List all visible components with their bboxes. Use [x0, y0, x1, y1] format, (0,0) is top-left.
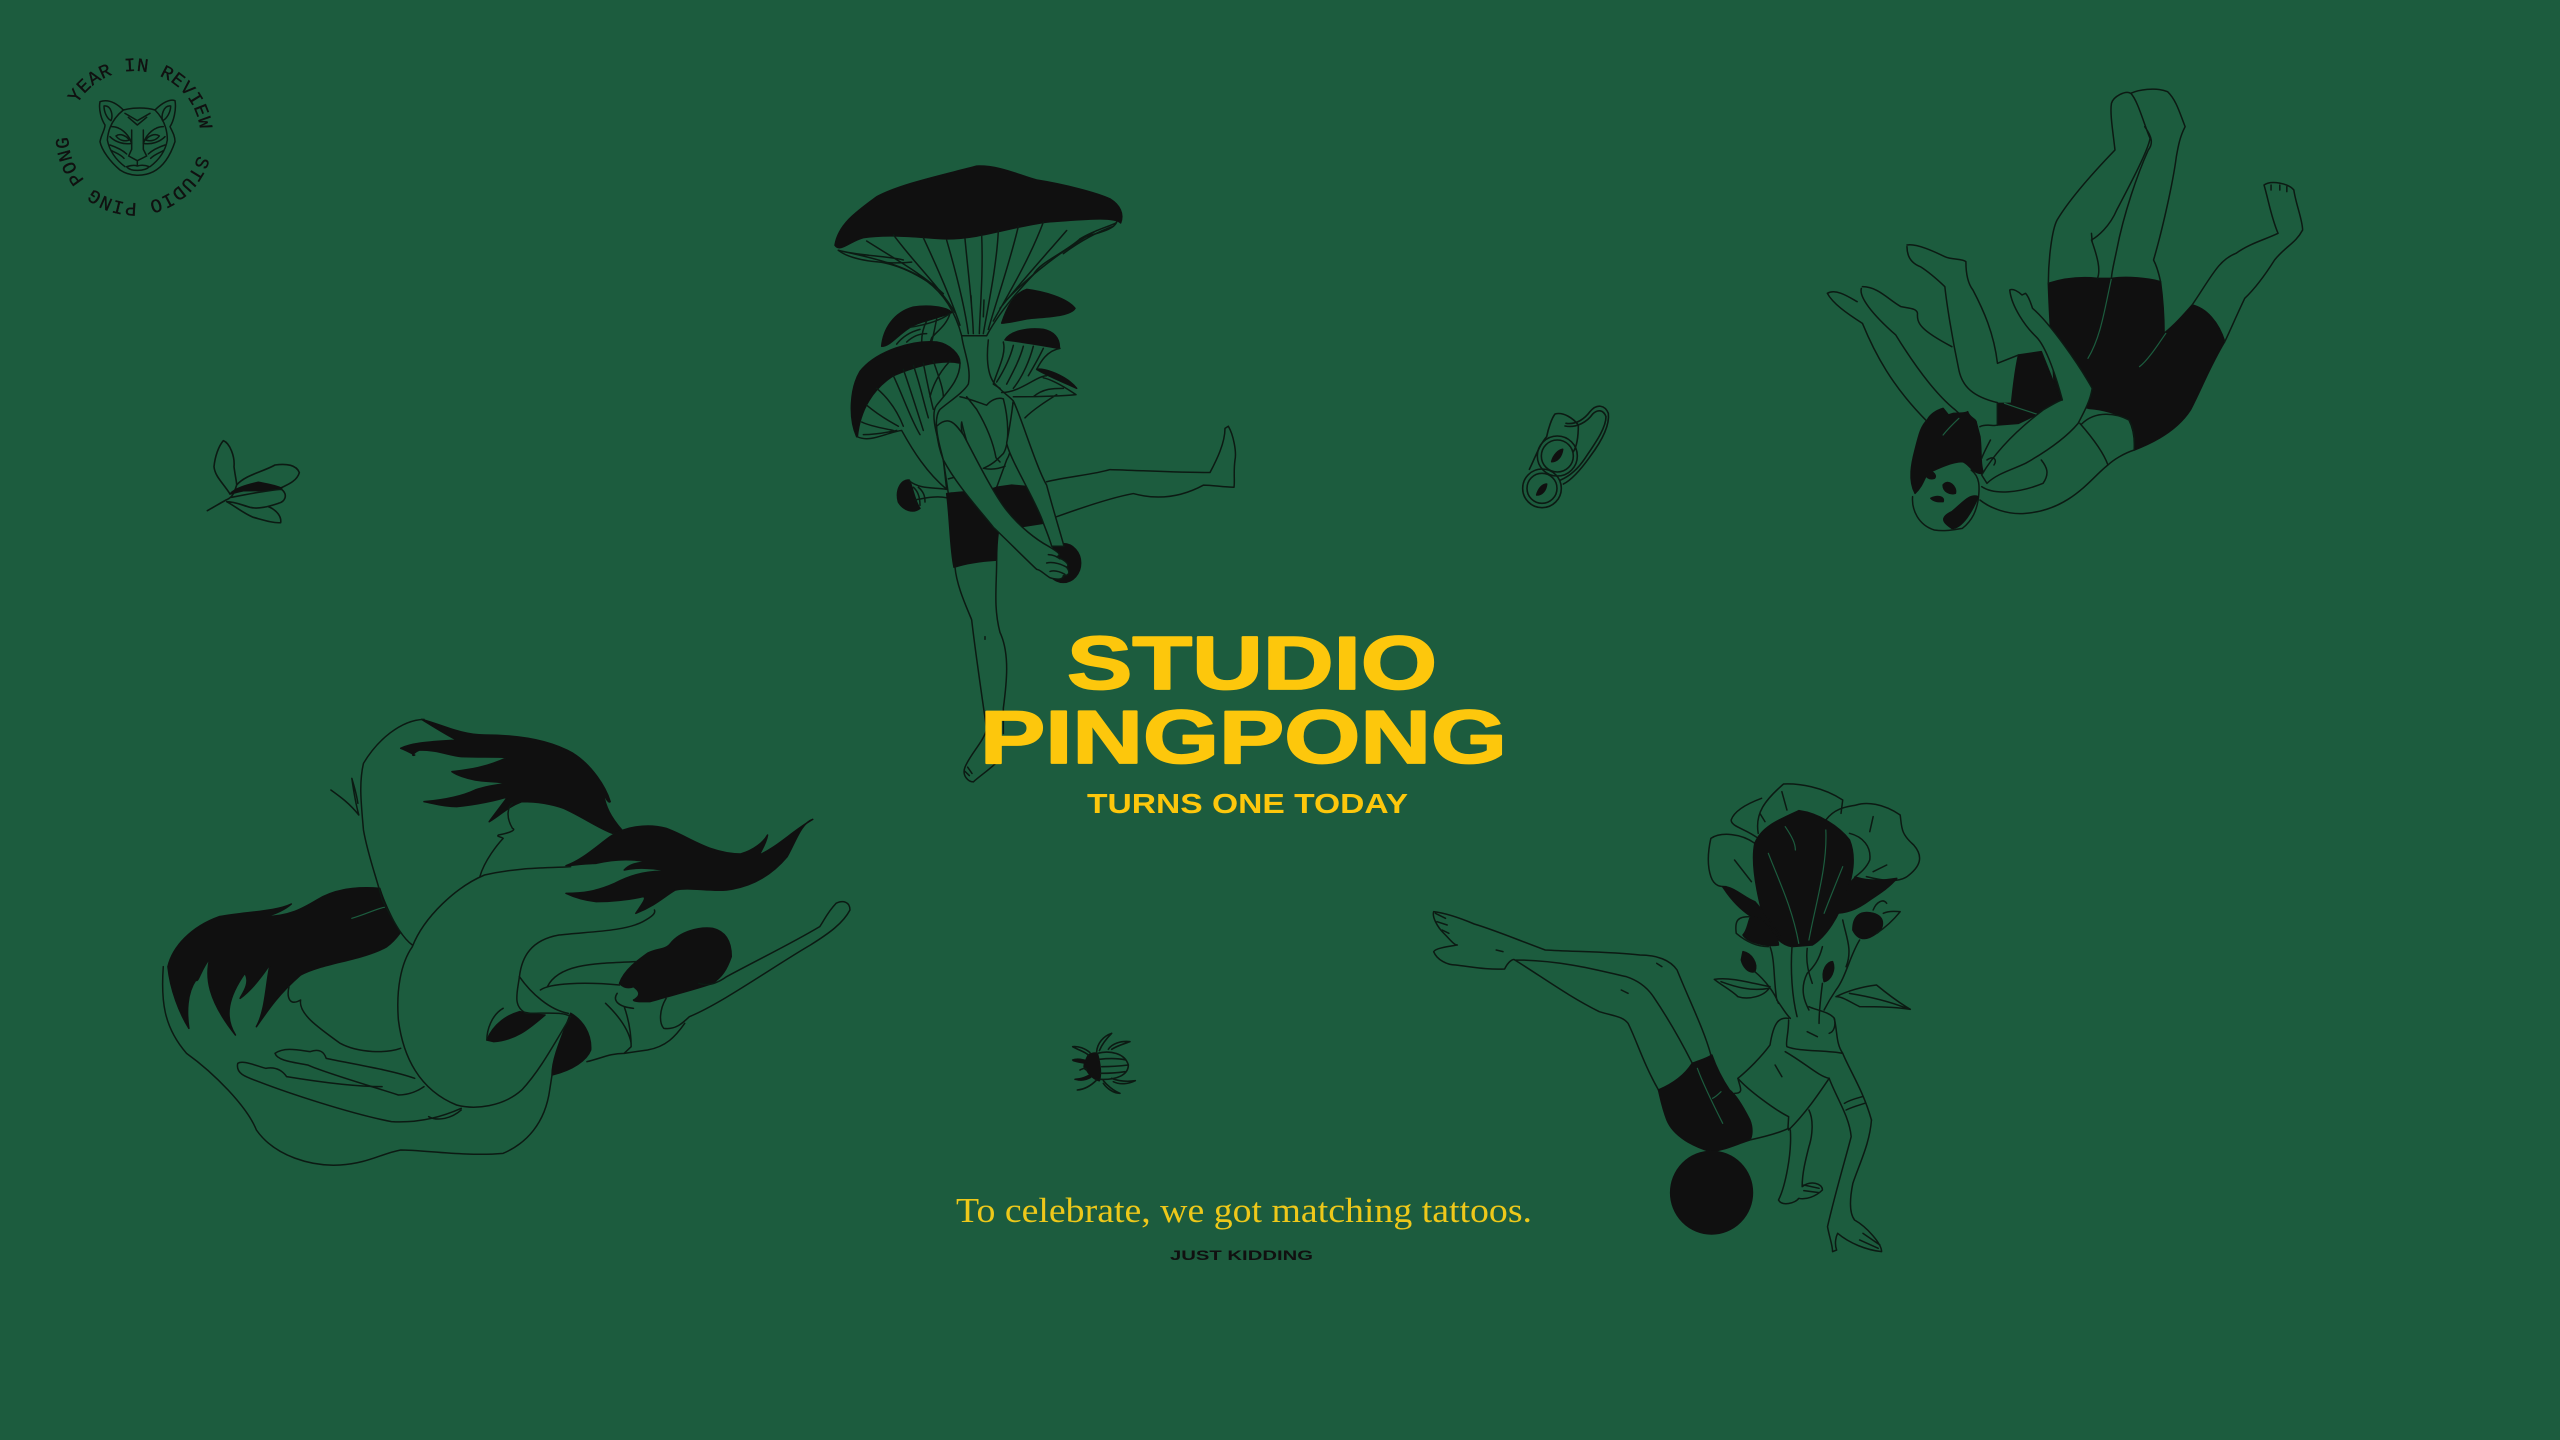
icon: goggles: [1523, 406, 1609, 508]
legs: [955, 426, 1235, 782]
badge: year in review tiger logo: [56, 58, 213, 216]
arms and ball: [937, 401, 1081, 582]
head and hair: [1912, 470, 1979, 531]
arm and torso: [1982, 290, 2092, 483]
illustration: long-haired flying figure: [163, 719, 850, 1165]
buds and leaves: [1743, 915, 1778, 945]
torso and arms: [1735, 1018, 1871, 1120]
body outlines: [361, 719, 424, 945]
title: studio pingpong: PINGPONG: [980, 695, 1507, 779]
icon: leaf sprig: [207, 441, 299, 523]
title: studio pingpong: [980, 621, 1507, 779]
badge: year in review tiger logo: YEAR IN REVIEW: [66, 58, 213, 128]
badge: year in review tiger logo: STUDIO PING PONG: [56, 138, 209, 216]
title: studio pingpong: STUDIO: [1067, 621, 1437, 705]
text: celebration line: To celebrate, we got matching tattoos.: [956, 1191, 1532, 1230]
subtitle: turns one today: TURNS ONE TODAY: [1087, 788, 1408, 819]
legs: [2048, 89, 2185, 283]
legs and shorts: [1433, 912, 1711, 1090]
flower: [1708, 784, 1920, 887]
illustration: flower headed figure with black ball: [1433, 784, 1920, 1252]
illustration: upside-down falling figure: [1827, 89, 2303, 531]
hair: [401, 719, 622, 833]
shorts: [2048, 277, 2225, 450]
stems: [1755, 920, 1860, 1033]
main mushroom: [835, 166, 1122, 336]
icon: beetle: [1073, 1033, 1135, 1093]
neck and torso: [936, 336, 1045, 567]
shorts: [487, 1012, 545, 1042]
ball: [1671, 1151, 1752, 1234]
illustration: mushroom headed figure: [835, 166, 1235, 782]
small mushrooms: [851, 289, 1077, 511]
text: just kidding: JUST KIDDING: [1170, 1247, 1313, 1263]
